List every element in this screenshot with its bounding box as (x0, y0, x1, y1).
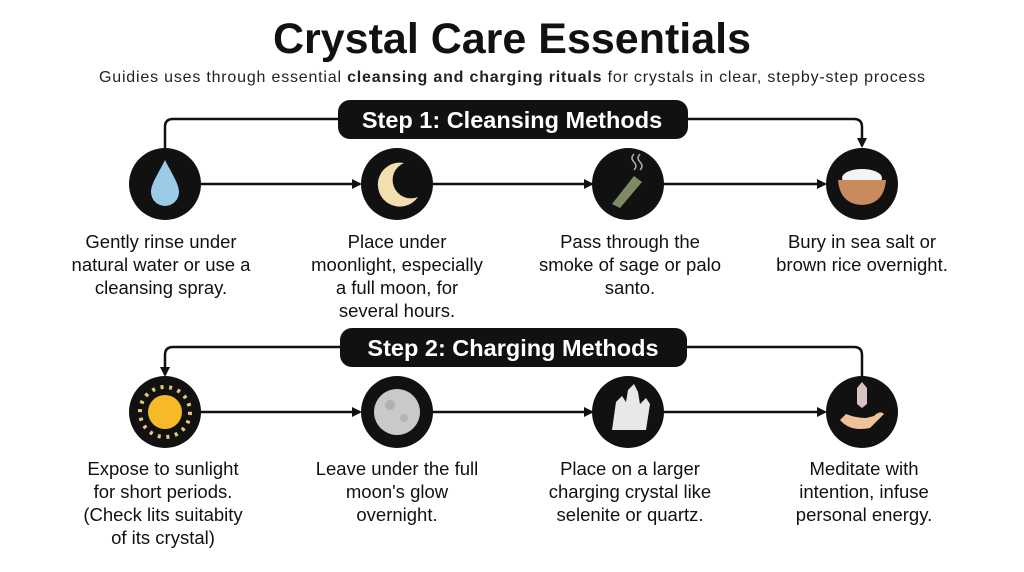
text row 2: charging crystal like (549, 481, 711, 502)
text row 2: moon's glow (346, 481, 449, 502)
connector: step 2 loop (165, 347, 862, 377)
text row 2: Meditate with (810, 458, 918, 479)
text row 1: several hours. (339, 300, 455, 321)
text row 1: moonlight, especially (311, 254, 484, 275)
title: Crystal Care Essentials (273, 15, 751, 63)
text row 2: of its crystal) (111, 527, 215, 548)
text row 1: brown rice overnight. (776, 254, 948, 275)
heading: step 1 pill (338, 100, 688, 139)
text row 1: Pass through the (560, 231, 700, 252)
icon: salt bowl (826, 148, 898, 220)
icon: full moon (361, 376, 433, 448)
icon: hand with crystal (826, 376, 898, 448)
text row 1: natural water or use a (72, 254, 251, 275)
text row 2: selenite or quartz. (556, 504, 704, 525)
arrows row 2 (200, 411, 825, 413)
text row 2: Expose to sunlight (87, 458, 239, 479)
subtitle: Guidies uses through essential cleansing and charging rituals for crystals in clear, stepby-step process (99, 69, 925, 86)
heading: step 2 pill: Step 2: Charging Methods (367, 335, 659, 361)
text row 2: overnight. (356, 504, 438, 525)
text row 2: for short periods. (94, 481, 232, 502)
text row 1: Bury in sea salt or (788, 231, 936, 252)
icon: water drop (129, 148, 201, 220)
text row 2: personal energy. (796, 504, 932, 525)
text row 2: (Check lits suitabity (83, 504, 243, 525)
text row 1: a full moon, for (336, 277, 458, 298)
icon: crystal cluster (592, 376, 664, 448)
heading: step 2 pill (340, 328, 687, 367)
text row 2: Place on a larger (560, 458, 700, 479)
text row 1: smoke of sage or palo (539, 254, 721, 275)
text row 1: cleansing spray. (95, 277, 227, 298)
text row 1: santo. (605, 277, 655, 298)
text row 2: intention, infuse (799, 481, 929, 502)
icon: sun (129, 376, 201, 448)
icon: sage bundle (592, 148, 664, 220)
text row 2 (83, 458, 932, 548)
text row 1 (72, 231, 948, 321)
text row 1: Gently rinse under (85, 231, 237, 252)
connector: step 1 loop (165, 119, 862, 148)
icon: crescent moon (361, 148, 433, 220)
heading: step 1 pill: Step 1: Cleansing Methods (362, 107, 662, 133)
text row 2: Leave under the full (316, 458, 478, 479)
text row 1: Place under (348, 231, 446, 252)
arrows row 1 (200, 183, 825, 185)
